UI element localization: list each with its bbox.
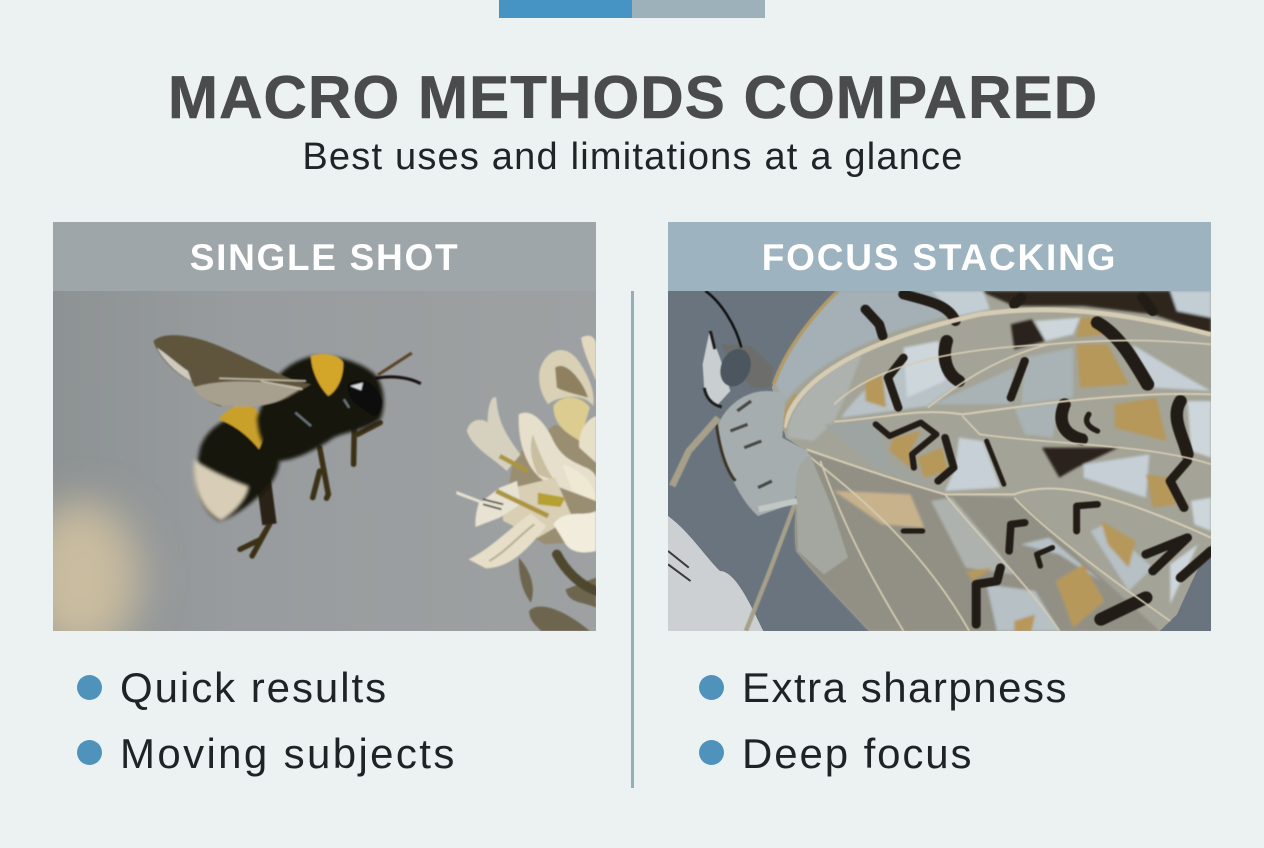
panel: single shot (53, 222, 596, 631)
wing colour patches (775, 291, 1211, 631)
bullet: moving subjects: Moving subjects (120, 730, 457, 777)
photo: butterfly close-up (668, 291, 1211, 631)
butterfly body (672, 291, 848, 631)
flower (456, 336, 596, 631)
bullet: deep focus: Deep focus (742, 730, 973, 777)
butterfly head (703, 331, 730, 406)
heading: single shot (53, 222, 596, 291)
white leaf (668, 516, 763, 631)
bullet: quick results: Quick results (120, 664, 388, 711)
center divider (631, 291, 634, 788)
panel: focus stacking (668, 222, 1211, 631)
wing veins (774, 291, 1211, 631)
bullet: extra sharpness: Extra sharpness (742, 664, 1068, 711)
list: focus stacking points (699, 664, 1068, 777)
bee (153, 335, 421, 556)
title: MACRO METHODS COMPARED (168, 64, 1098, 131)
subtitle: Best uses and limitations at a glance (302, 136, 964, 178)
heading: focus stacking: FOCUS STACKING (762, 237, 1117, 278)
list: single shot points (77, 664, 457, 777)
heading: single shot: SINGLE SHOT (190, 237, 459, 278)
wing base (772, 291, 1211, 631)
top accent bar (499, 0, 765, 18)
butterfly legs (672, 418, 718, 486)
wing dark markings (865, 294, 1211, 624)
photo: bumblebee in flight (53, 291, 596, 631)
heading: focus stacking (668, 222, 1211, 291)
